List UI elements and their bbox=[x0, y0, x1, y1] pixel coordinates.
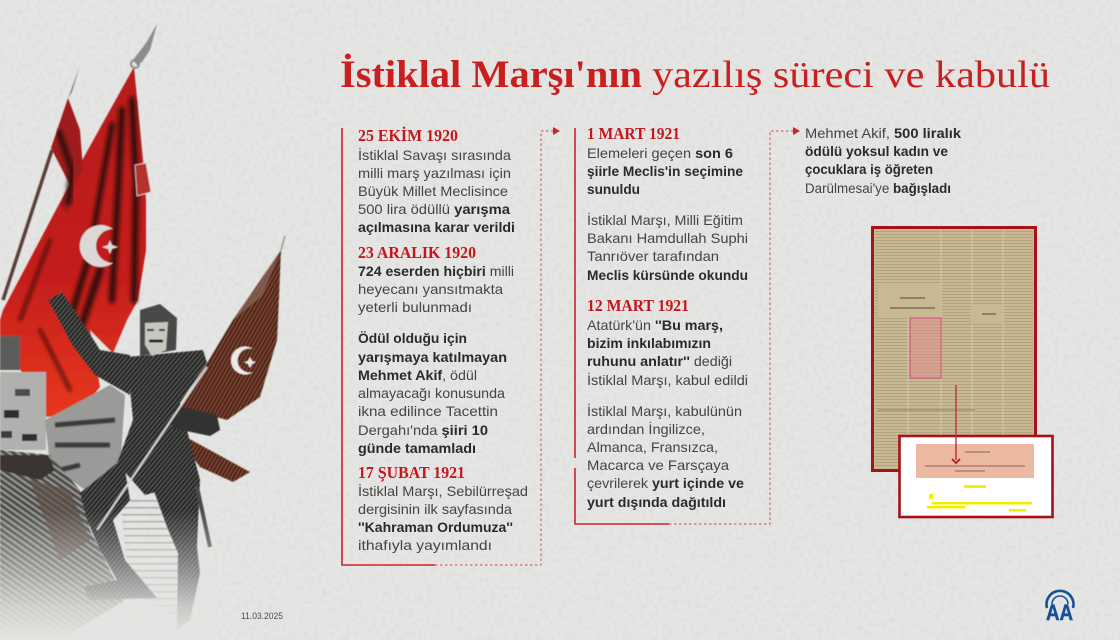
entry: 23 Aralık 1920 bbox=[358, 243, 514, 315]
text block: Meclis reading bbox=[587, 211, 748, 283]
entry: 17 Şubat 1921 bbox=[358, 463, 528, 553]
text block: translations bbox=[587, 402, 744, 510]
entry: 17 Şubat 1921: 17 ŞUBAT 1921 bbox=[358, 463, 465, 482]
title: yazılış süreci ve kabulü bbox=[652, 54, 1050, 96]
text block: donation: çocuklara iş öğreten bbox=[805, 161, 933, 177]
frame: first panel bbox=[342, 127, 560, 565]
entry: 25 Ekim 1920: İstiklal Savaşı sırasında bbox=[358, 146, 511, 163]
text block: donation: ödülü yoksul kadın ve bbox=[805, 143, 948, 159]
text block: Meclis reading: Bakanı Hamdullah Suphi bbox=[587, 230, 748, 246]
text block: translations: ardından İngilizce, bbox=[587, 420, 705, 437]
entry: 1 Mart 1921: şiirle Meclis'in seçimine bbox=[587, 163, 743, 179]
text block: Meclis reading: Meclis kürsünde okundu bbox=[587, 267, 748, 283]
text block: translations: İstiklal Marşı, kabulünün bbox=[587, 402, 742, 419]
entry: 17 Şubat 1921: ''Kahraman Ordumuza'' bbox=[358, 519, 513, 535]
pink highlighted column bbox=[910, 318, 941, 378]
entry: 17 Şubat 1921: dergisinin ilk sayfasında bbox=[358, 501, 512, 517]
text block: Mehmet Akif: ikna edilince Tacettin bbox=[358, 403, 498, 419]
entry: 23 Aralık 1920: 724 eserden hiçbiri milli bbox=[358, 263, 514, 279]
entry: 12 Mart 1921: ruhunu anlatır'' dediği bbox=[587, 353, 732, 369]
dark right flag bbox=[173, 236, 285, 482]
newspaper page bbox=[872, 228, 1036, 470]
entry: 12 Mart 1921: 12 MART 1921 bbox=[587, 296, 689, 315]
fortress and rubble bbox=[0, 336, 125, 640]
panel: second stage timeline bbox=[575, 124, 800, 524]
entry: 25 Ekim 1920: Büyük Millet Meclisince bbox=[358, 183, 508, 199]
entry: 12 Mart 1921 bbox=[587, 296, 748, 388]
entry: 23 Aralık 1920: 23 ARALIK 1920 bbox=[358, 243, 476, 262]
entry: 25 Ekim 1920 bbox=[358, 126, 515, 235]
text block: Mehmet Akif: Mehmet Akif, ödül bbox=[358, 367, 477, 383]
title bbox=[340, 52, 1050, 96]
bottom fade bbox=[0, 510, 215, 640]
entry: 1 Mart 1921: 1 MART 1921 bbox=[587, 124, 680, 143]
text block: Meclis reading: Tanrıöver tarafından bbox=[587, 248, 719, 264]
newspaper document bbox=[872, 228, 1052, 517]
entry: 25 Ekim 1920: milli marş yazılması için bbox=[358, 165, 511, 181]
text block: Mehmet Akif: Ödül olduğu için bbox=[358, 330, 467, 346]
text block: Mehmet Akif: almayacağı konusunda bbox=[358, 385, 505, 401]
frame: second panel bbox=[575, 127, 800, 524]
entry: 1 Mart 1921 bbox=[587, 124, 743, 197]
text block: Mehmet Akif bbox=[358, 330, 507, 456]
entry: 23 Aralık 1920: yeterli bulunmadı bbox=[358, 299, 472, 315]
entry: 12 Mart 1921: bizim inkılabımızın bbox=[587, 335, 711, 351]
text block: donation: Mehmet Akif, 500 liralık bbox=[805, 125, 961, 141]
title: İstiklal Marşı'nın bbox=[340, 52, 642, 96]
text block: translations: yurt dışında dağıtıldı bbox=[587, 494, 726, 510]
date: 11.03.2025 bbox=[241, 611, 283, 621]
entry: 1 Mart 1921: Elemeleri geçen son 6 bbox=[587, 145, 733, 161]
background hillside bbox=[120, 490, 178, 620]
entry: 25 Ekim 1920: 500 lira ödüllü yarışma bbox=[358, 201, 510, 217]
entry: 25 Ekim 1920: 25 EKİM 1920 bbox=[358, 126, 458, 145]
entry: 17 Şubat 1921: İstiklal Marşı, Sebilürreşad bbox=[358, 482, 528, 499]
spear tip bbox=[131, 24, 157, 68]
entry: 23 Aralık 1920: heyecanı yansıtmakta bbox=[358, 281, 503, 297]
entry: 25 Ekim 1920: açılmasına karar verildi bbox=[358, 219, 515, 235]
entry: 12 Mart 1921: Atatürk'ün ''Bu marş, bbox=[587, 317, 723, 333]
illustration: soldier with Turkish flags bbox=[0, 24, 285, 640]
entry: 12 Mart 1921: İstiklal Marşı, kabul edildi bbox=[587, 371, 748, 388]
large red flag bbox=[0, 67, 151, 417]
text block: donation: Darülmesai'ye bağışladı bbox=[805, 180, 951, 196]
flag poles bbox=[3, 150, 52, 300]
small flag bbox=[51, 65, 83, 215]
entry: 17 Şubat 1921: ithafıyla yayımlandı bbox=[358, 537, 492, 553]
zoomed excerpt bbox=[900, 436, 1052, 517]
text block: Mehmet Akif: yarışmaya katılmayan bbox=[358, 349, 507, 365]
text block: translations: Macarca ve Farsçaya bbox=[587, 457, 729, 473]
text block: Meclis reading: İstiklal Marşı, Milli Eğitim bbox=[587, 211, 743, 228]
text block: translations: çevrilerek yurt içinde ve bbox=[587, 475, 744, 491]
text block: Mehmet Akif: günde tamamladı bbox=[358, 440, 476, 456]
AA logo bbox=[1046, 591, 1074, 625]
text block: donation bbox=[805, 125, 961, 196]
text block: translations: Almanca, Fransızca, bbox=[587, 439, 718, 455]
AA logo: AA bbox=[1046, 600, 1073, 625]
soldier bbox=[48, 292, 220, 630]
text block: Mehmet Akif: Dergahı'nda şiiri 10 bbox=[358, 422, 488, 438]
panel: first stage timeline bbox=[342, 126, 560, 565]
entry: 1 Mart 1921: sunuldu bbox=[587, 181, 640, 197]
arrow bbox=[952, 385, 960, 463]
